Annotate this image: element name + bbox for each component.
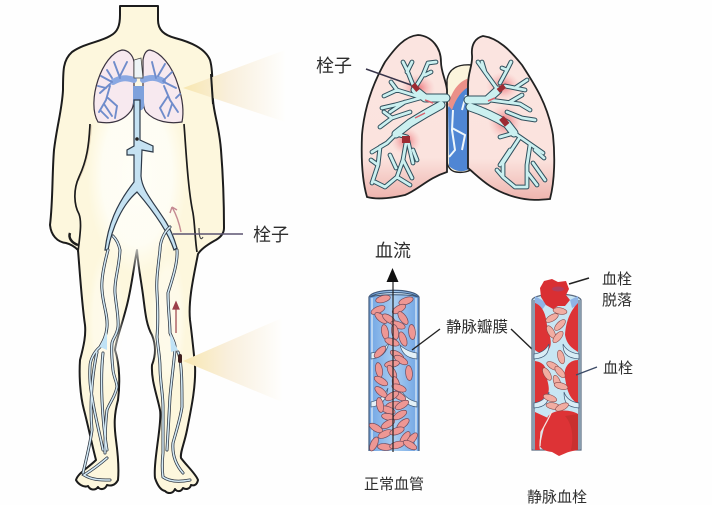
left arm inner line — [75, 124, 90, 252]
thrombus in calf — [178, 354, 182, 363]
vessel walls — [534, 300, 579, 450]
valves — [371, 342, 417, 407]
label: embolus, leg: 栓子 — [253, 225, 289, 245]
right hand detail — [199, 228, 203, 239]
label: clot detached, line 2: 脱落 — [602, 292, 632, 309]
arm outline over the cone — [211, 74, 213, 104]
heart white vessels — [449, 95, 466, 157]
thrombus masses — [535, 303, 578, 456]
clot shading — [552, 286, 564, 292]
figure: vein thrombosis — [532, 279, 581, 456]
label line: clot — [576, 367, 597, 375]
vessel body — [532, 294, 581, 450]
label: clot detached: 血栓 — [602, 271, 632, 288]
trachea — [134, 58, 143, 78]
small left lung — [94, 50, 134, 123]
inner walls — [372, 298, 416, 451]
emboli — [402, 83, 510, 143]
pointer cone: lungs — [183, 50, 285, 122]
arm shadow — [78, 125, 91, 180]
left hand detail — [69, 233, 78, 245]
blood flow arrow: thigh — [170, 207, 181, 232]
figure: normal vein — [368, 268, 419, 452]
vessel top opening — [370, 292, 418, 297]
label line: valve, right — [511, 329, 533, 350]
embolus glows — [391, 72, 522, 155]
vessel body — [369, 290, 419, 451]
figure: enlarged lungs — [362, 35, 554, 200]
pointer cone: calf — [183, 318, 282, 402]
vena cava and iliac veins — [105, 100, 177, 250]
small red streaks — [415, 98, 495, 118]
small lung bronchi — [98, 62, 180, 118]
heart — [447, 65, 472, 172]
label: embolus, lung: 栓子 — [316, 56, 352, 76]
upper vessel tint — [535, 296, 578, 310]
blood flow arrow: calf — [173, 302, 179, 333]
torso pale centre — [87, 75, 187, 275]
label: clot: 血栓 — [603, 360, 633, 377]
dark shading on lower clot — [565, 414, 578, 450]
heart blue chamber — [448, 85, 470, 171]
vein wedges at the knee — [100, 333, 178, 352]
flow arrow — [386, 268, 398, 452]
left lung — [362, 35, 447, 198]
figure: human body with veins — [50, 6, 224, 493]
heart upper red vessel — [448, 78, 470, 110]
red blood cells — [541, 307, 570, 413]
small heart — [133, 86, 144, 111]
thigh pale centres — [88, 250, 186, 390]
right lung — [468, 36, 554, 200]
crack in lower clot — [540, 411, 552, 446]
valves — [534, 344, 579, 408]
leg veins — [83, 227, 190, 481]
clot dot — [135, 137, 139, 141]
bronchial trees — [371, 62, 545, 187]
red blood cells — [368, 294, 419, 452]
label line: thigh embolus — [173, 233, 243, 235]
label line: lung embolus — [366, 69, 411, 85]
detached clot — [540, 279, 570, 309]
label line: detached clot — [569, 278, 589, 284]
body outline — [50, 6, 224, 493]
caption: normal vessel: 正常血管 — [364, 476, 424, 493]
vessel walls — [369, 290, 419, 451]
label: venous valve: 静脉瓣膜 — [446, 318, 508, 336]
label line: valve, left — [412, 329, 440, 350]
heading: blood flow: 血流 — [375, 241, 411, 261]
right arm inner line — [184, 124, 197, 252]
small right lung — [143, 50, 183, 123]
